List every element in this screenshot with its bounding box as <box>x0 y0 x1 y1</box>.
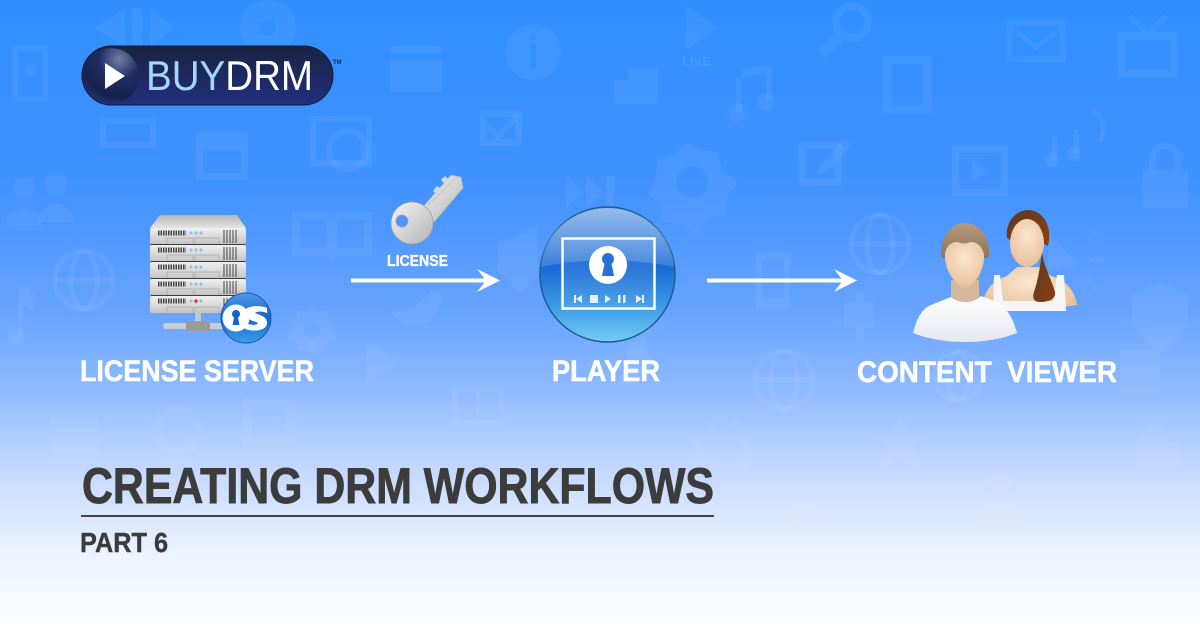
title: CREATING DRM WORKFLOWS <box>82 458 714 514</box>
arrow: player to viewer <box>707 269 857 292</box>
server rack units <box>150 228 246 313</box>
background globes <box>55 215 982 409</box>
player screen <box>562 238 654 308</box>
arrow: server to player <box>351 269 500 292</box>
icon: content viewers <box>913 210 1077 342</box>
logo wordmark: BUYDRM <box>146 52 313 99</box>
icon: player <box>540 207 675 342</box>
server body backing <box>151 228 245 313</box>
player controls <box>574 295 644 303</box>
icon: license server <box>150 215 271 343</box>
subtitle: PART 6 <box>80 527 168 558</box>
logo pill background <box>82 46 333 105</box>
label: content viewer: CONTENT VIEWER <box>857 356 1117 389</box>
title underline <box>81 515 714 517</box>
OS badge <box>221 293 271 343</box>
label: license: LICENSE <box>387 253 448 270</box>
server roof <box>150 215 246 228</box>
woman <box>983 210 1077 311</box>
player gloss <box>541 208 674 267</box>
logo play button <box>83 48 139 104</box>
logo trademark: TM <box>333 60 342 66</box>
network connector <box>163 313 229 331</box>
icon: license key <box>391 175 463 244</box>
man <box>913 223 1017 342</box>
keyhole <box>589 246 627 284</box>
background pattern of faint media icons: LIVE <box>682 54 711 69</box>
player globe <box>540 207 675 342</box>
logo: BUYDRM <box>82 46 342 105</box>
label: license server: LICENSE SERVER <box>80 355 314 388</box>
label: player: PLAYER <box>552 355 660 388</box>
